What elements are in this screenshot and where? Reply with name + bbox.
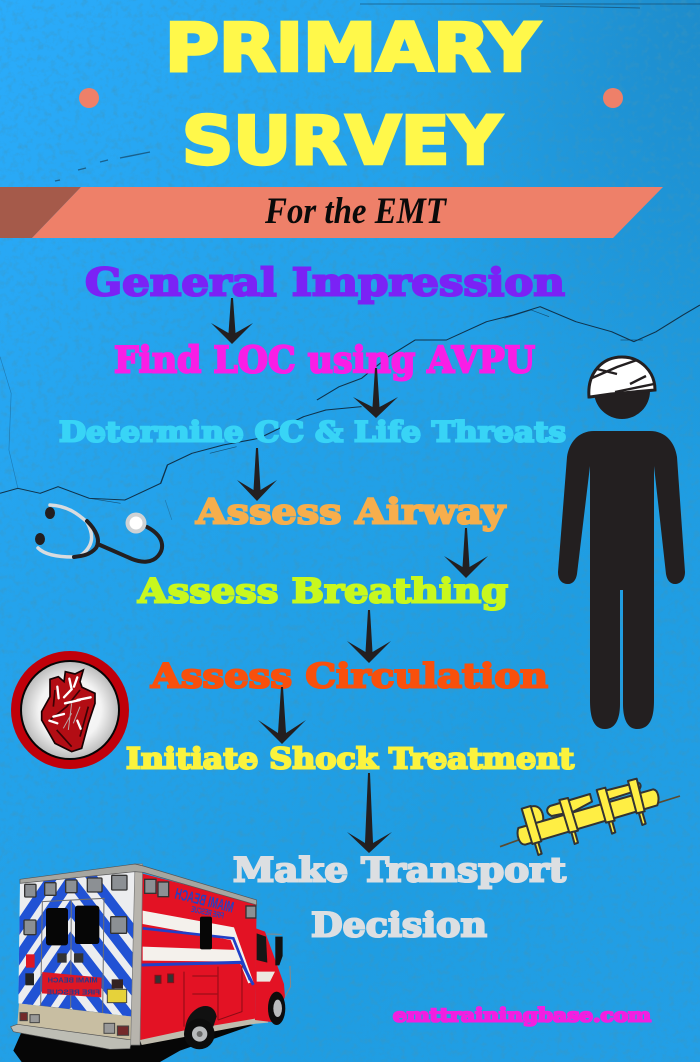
cab [255, 928, 291, 1023]
chest piece [126, 512, 146, 534]
rear sign: MIAMI BEACH [48, 976, 98, 985]
arrow 3 [237, 448, 277, 501]
website: emttrainingbase.com [393, 1004, 651, 1026]
side body [138, 870, 258, 1043]
rear chevrons [18, 876, 134, 1016]
injured person figure [558, 357, 685, 729]
step: General Impression: General Impression [85, 260, 565, 304]
patient [547, 783, 641, 816]
arrow 2 [353, 368, 398, 418]
rear wheel [184, 1006, 217, 1049]
rear face [18, 872, 134, 1016]
tail lights [20, 1013, 129, 1035]
step: Assess Circulation: Assess Circulation [150, 656, 548, 696]
arrow 4 [444, 528, 488, 578]
legs [535, 812, 646, 855]
roof rail [20, 864, 257, 905]
heart badge [11, 651, 129, 769]
arrow 6 [258, 687, 306, 744]
front wheel [268, 992, 285, 1025]
stretcher [500, 779, 680, 855]
decorative dots [79, 88, 623, 108]
ground shadow [13, 1020, 253, 1062]
rear details [25, 953, 127, 1003]
banner [0, 187, 663, 238]
straps [522, 779, 645, 844]
rear door windows [46, 906, 99, 945]
step: Determine CC: Determine CC & Life Threats [59, 416, 566, 448]
arrows [211, 298, 488, 853]
side skirt [140, 1017, 268, 1045]
body corner post [131, 864, 143, 1045]
step: Make Transport Decision [233, 850, 566, 946]
banner subtitle: For the EMT [264, 191, 447, 232]
wall cracks [0, 4, 700, 520]
stethoscope [35, 505, 162, 562]
step: Find LOC: Find LOC using AVPU [114, 340, 535, 382]
side lettering: MIAMI BEACH [173, 886, 235, 917]
title [165, 10, 540, 180]
bumper [11, 1024, 132, 1049]
ambulance [11, 850, 291, 1062]
head bandage [589, 357, 655, 397]
rear sign [42, 972, 102, 997]
white side stripes [143, 911, 253, 983]
step: Make Transport Decision: Make Transport [233, 850, 566, 890]
head roll [528, 806, 543, 827]
board [518, 789, 659, 845]
ear tips [35, 507, 55, 545]
step: Initiate Shock Treatment: Initiate Shock Treatment [126, 742, 575, 776]
arrow 1 [211, 298, 253, 344]
arrow 5 [347, 610, 391, 663]
rear sign: FIRE RESCUE [47, 987, 100, 996]
side lettering: FIRE RESCUE [190, 904, 225, 921]
step: Make Transport Decision: Decision [311, 906, 487, 946]
lower rear panel [17, 1003, 132, 1040]
pole [500, 796, 680, 847]
title: SURVEY [182, 102, 502, 180]
figure silhouette [558, 431, 685, 729]
door frame [41, 898, 104, 1013]
side lights [145, 879, 256, 918]
side lettering [173, 886, 235, 921]
head [594, 363, 650, 419]
step: Assess Airway: Assess Airway [195, 492, 507, 532]
arrow 7 [347, 773, 392, 853]
title: PRIMARY [165, 10, 540, 86]
rear lights [24, 875, 127, 935]
step: Assess Breathing: Assess Breathing [137, 572, 508, 612]
anatomical heart [42, 670, 95, 752]
side compartments [155, 965, 242, 1027]
